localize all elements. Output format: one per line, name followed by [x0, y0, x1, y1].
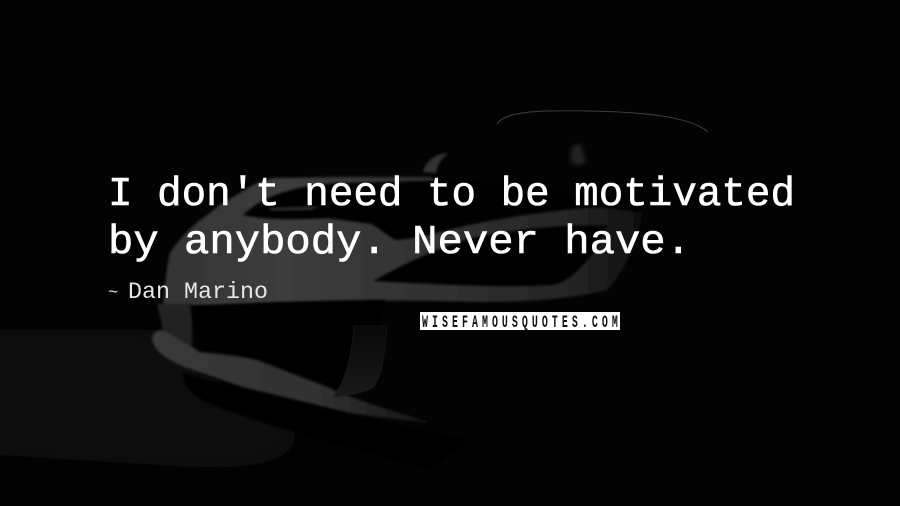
headlight	[373, 226, 608, 286]
left grille pillar	[157, 304, 192, 352]
windshield highlight	[268, 206, 320, 211]
front bumper	[152, 330, 433, 423]
car illustration	[152, 111, 708, 470]
air duct	[333, 326, 387, 397]
roof line	[497, 111, 708, 132]
grille opening	[190, 300, 385, 388]
logo text: WISEFAMOUSQUOTES.COM	[422, 313, 618, 333]
mirror left	[423, 153, 448, 173]
logo background	[420, 312, 620, 330]
author attribution	[108, 279, 268, 305]
quote line 2: by anybody. Never have.	[108, 220, 691, 266]
quote line 1: I don't need to be motivated	[108, 172, 795, 218]
author name: Dan Marino	[128, 279, 268, 305]
background floor glow	[0, 330, 400, 470]
tilde: ~	[108, 284, 118, 303]
quote text	[108, 172, 795, 266]
car body	[163, 177, 642, 306]
windshield	[243, 180, 650, 240]
logo badge	[420, 312, 620, 333]
shadow beneath bumper	[183, 372, 470, 470]
mirror centre	[570, 144, 586, 166]
